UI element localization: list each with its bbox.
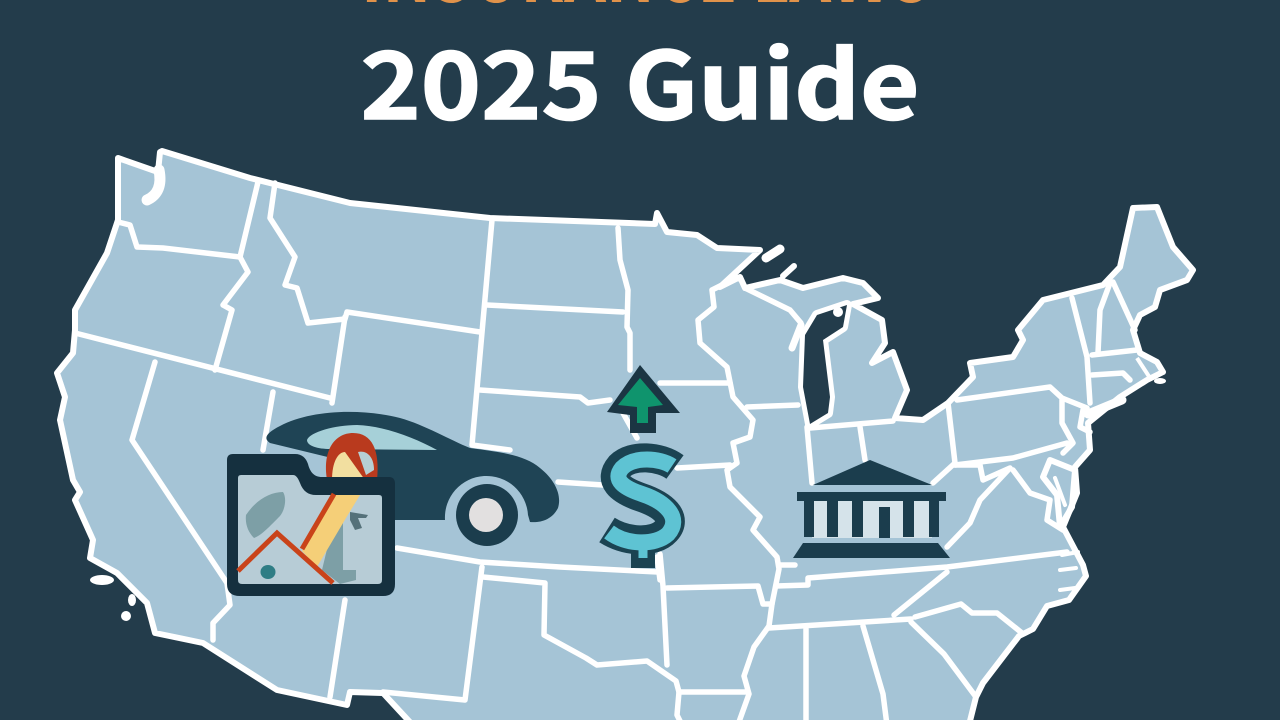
map of the United States: [57, 151, 1193, 720]
Lake Michigan: [803, 305, 847, 424]
car window: [307, 425, 437, 450]
state borders: [75, 182, 1137, 720]
gray blob: [246, 492, 285, 538]
land outline: [57, 151, 1193, 720]
icon: folder with map: [227, 454, 395, 596]
lakes and islands detail: [90, 170, 1166, 621]
icon: map pin head: [326, 433, 378, 480]
yellow road: [302, 495, 360, 567]
icon: car: [266, 412, 559, 546]
icon: dollar sign: [607, 458, 675, 568]
icon: government building: [793, 460, 950, 558]
car wheel: [456, 484, 518, 546]
gray figure: [322, 513, 356, 584]
orange road edge: [302, 494, 334, 549]
orange mountain line: [238, 533, 333, 583]
teal dot: [260, 565, 276, 579]
title: 2025 Guide: 2025 Guide: [360, 11, 920, 146]
icon: upward arrow: [607, 365, 680, 433]
